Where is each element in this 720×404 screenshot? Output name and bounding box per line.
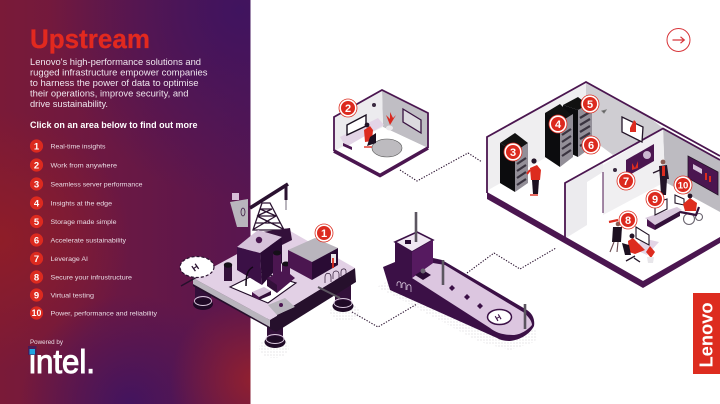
deck edge <box>193 268 356 332</box>
marker 3: 3 <box>510 147 516 159</box>
building floor <box>487 135 720 284</box>
AI presentation screen <box>626 144 654 177</box>
server room left wall <box>487 82 586 193</box>
rack 4 <box>545 104 573 167</box>
marker 8: 8 <box>625 215 631 227</box>
list item 4: 4 <box>34 198 40 209</box>
list item 4 <box>30 196 112 210</box>
list item 1 <box>30 139 105 153</box>
desk <box>340 118 384 147</box>
crane counterweight <box>230 193 248 227</box>
numbered list <box>30 139 158 320</box>
crane boom <box>250 184 288 210</box>
wall picture <box>403 109 421 133</box>
marker 6: 6 <box>588 140 594 152</box>
intro text block: Lenovo's high-performance solutions and <box>30 56 201 67</box>
list item 6: Accelerate sustainability <box>50 237 127 244</box>
powered by label: Powered by <box>30 339 64 346</box>
list item 2 <box>30 158 117 172</box>
next arrow button <box>667 28 690 52</box>
list item 3 <box>30 177 143 191</box>
list item 9 <box>30 288 94 302</box>
front corner housing <box>268 298 295 328</box>
list item 6: 6 <box>34 235 39 246</box>
intro text block: rugged infrastructure empower companies <box>30 66 208 78</box>
drilling tower <box>253 203 284 230</box>
oil platform <box>180 184 360 358</box>
hull <box>383 258 534 341</box>
right wall <box>382 90 428 148</box>
helipad: H <box>190 262 201 274</box>
office wall screen <box>688 156 718 195</box>
chimney base <box>267 270 295 293</box>
marker 2: 2 <box>345 103 351 115</box>
deck railings <box>325 269 346 283</box>
list item 7: Leverage AI <box>50 256 88 263</box>
testing desk <box>645 195 684 230</box>
list item 1: Real-time insights <box>50 143 106 150</box>
list item 5 <box>30 215 117 228</box>
marker 5: 5 <box>587 99 593 111</box>
list item 10 <box>30 306 158 320</box>
monitors <box>347 115 366 135</box>
intro text block: drive sustainability. <box>30 98 108 109</box>
wall camera <box>602 110 606 113</box>
plant <box>386 112 396 125</box>
intro text block: their operations, improve security, and <box>30 88 188 98</box>
list item 2: 2 <box>34 160 39 171</box>
Lenovo logo: Lenovo <box>696 302 716 368</box>
control room box <box>288 238 338 280</box>
room outline <box>334 90 428 151</box>
presenter <box>653 160 669 195</box>
superstructure <box>395 232 433 278</box>
left wall <box>334 90 383 151</box>
deck hatches <box>449 285 483 309</box>
left vent cylinder <box>224 262 232 281</box>
dotted connector lines <box>352 153 556 327</box>
list item 8 <box>30 270 132 284</box>
call to action heading: Click on an area below to find out more <box>30 120 198 130</box>
floor <box>334 127 428 175</box>
chimneys <box>273 250 290 280</box>
building outline <box>487 82 720 193</box>
standing woman <box>609 220 622 252</box>
base plate <box>230 272 296 303</box>
list item 5: 5 <box>34 217 40 228</box>
rack 3 <box>500 133 528 192</box>
platform legs <box>193 276 354 348</box>
marker 10 <box>674 176 692 194</box>
marker 9 <box>646 190 664 208</box>
list item 1: 1 <box>34 141 40 152</box>
marker 7: 7 <box>623 176 629 188</box>
engineer at rack <box>527 158 541 195</box>
list item 6 <box>30 233 127 247</box>
list item 10: 10 <box>32 308 41 318</box>
marker 6 <box>582 136 600 154</box>
list item 7: 7 <box>34 254 39 265</box>
marker 9: 9 <box>652 194 658 206</box>
vessel helipad: H <box>493 312 503 323</box>
list item 2: Work from anywhere <box>50 162 117 169</box>
marker 8 <box>619 211 637 229</box>
vessel shadow dots <box>377 280 537 350</box>
worker chair <box>367 133 376 146</box>
masts <box>416 212 525 329</box>
list item 9: Virtual testing <box>50 292 94 299</box>
list item 3: 3 <box>34 179 39 190</box>
small deck box <box>252 287 271 300</box>
deck pipe <box>318 287 340 298</box>
marker 10: 10 <box>678 180 688 192</box>
wall lamp <box>372 103 376 107</box>
list item 4: Insights at the edge <box>50 200 112 207</box>
list item 9: 9 <box>34 290 39 301</box>
marker 4 <box>549 115 567 133</box>
Lenovo logo <box>693 293 720 374</box>
server room right wall <box>586 82 663 155</box>
list item 5: Storage made simple <box>50 219 117 226</box>
room: work from anywhere <box>334 90 428 176</box>
vessel <box>377 212 537 350</box>
panel: left gradient sidebar <box>0 0 250 404</box>
platform shadow dots <box>259 303 360 358</box>
wheelchair user <box>680 194 702 224</box>
rack pair 5 and 6 <box>563 97 592 157</box>
marker 3 <box>504 143 522 161</box>
building: data centre and office <box>487 82 720 288</box>
title: Upstream <box>30 24 150 54</box>
deck <box>412 263 532 335</box>
hull markings <box>397 282 411 292</box>
intro text block: to harness the power of data to optimise <box>30 77 198 88</box>
seated security analyst <box>622 234 645 262</box>
marker 5 <box>581 95 599 113</box>
partition wall <box>603 128 665 215</box>
list item 8: Secure your infrustructure <box>50 274 132 281</box>
office back wall <box>663 128 720 212</box>
marker 1: 1 <box>321 228 327 240</box>
list item 3: Seamless server performance <box>50 181 143 188</box>
list item 8: 8 <box>34 272 39 283</box>
red plant <box>646 246 655 263</box>
rear tank block <box>262 228 292 250</box>
deck surface <box>193 228 355 320</box>
wall clock <box>613 168 617 172</box>
intel logo: intel. <box>29 343 95 380</box>
wall monitor with hand <box>622 117 643 142</box>
list item 7 <box>30 252 88 265</box>
tall process building <box>237 230 282 286</box>
helipad <box>180 256 214 286</box>
marker 4: 4 <box>555 119 562 131</box>
security desk <box>636 227 659 255</box>
intro text block <box>30 56 208 109</box>
list item 10: Power, performance and reliability <box>50 310 158 317</box>
marker 7 <box>617 172 635 190</box>
vessel helipad <box>488 310 512 324</box>
marker 1 <box>315 224 333 242</box>
seated worker <box>364 126 373 142</box>
rug <box>372 139 402 157</box>
building base band <box>487 192 720 288</box>
deck crane base <box>415 268 431 280</box>
